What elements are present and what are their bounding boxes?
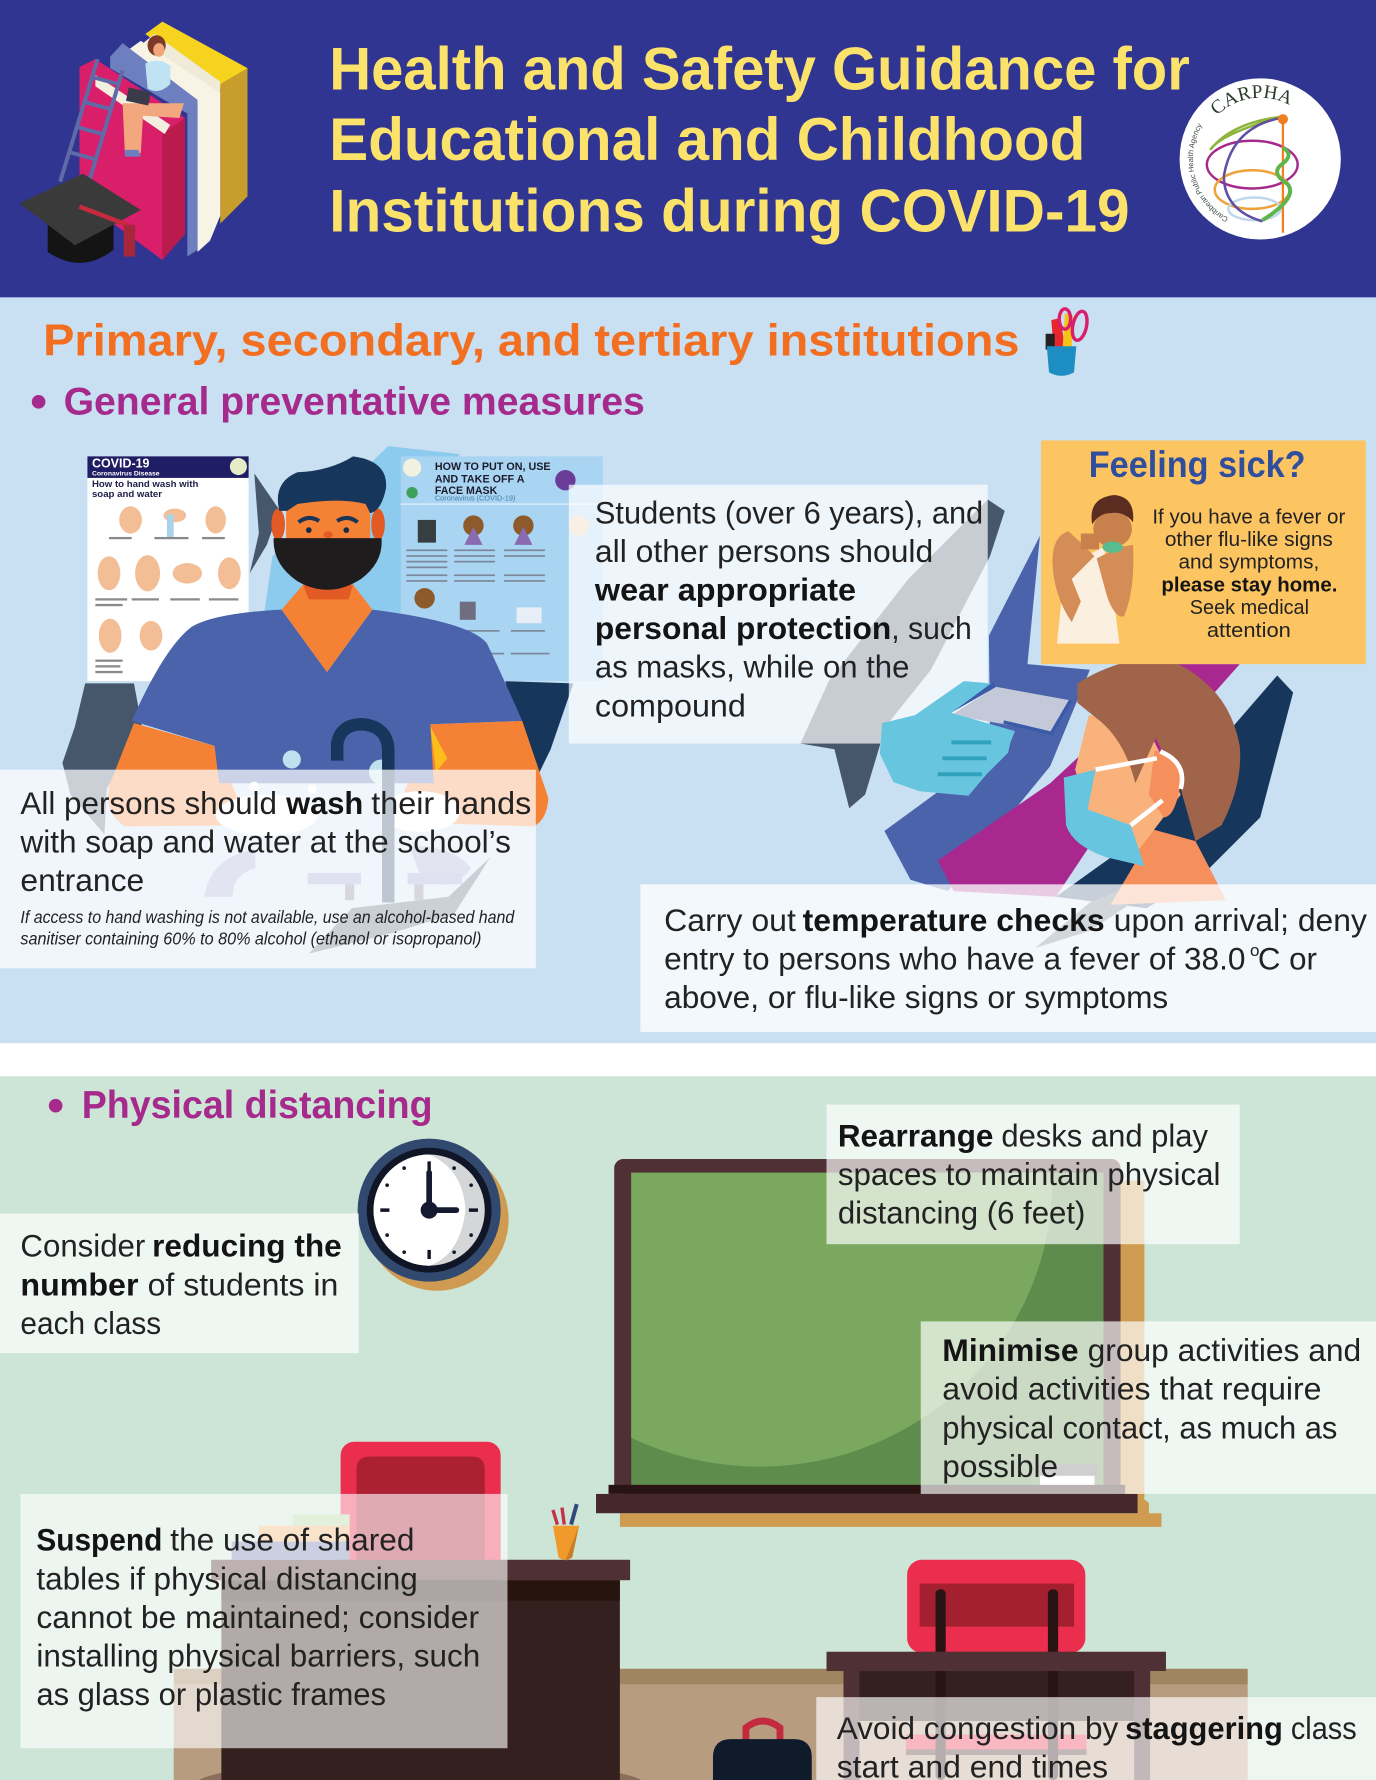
- poster: how to hand wash: [87, 456, 249, 681]
- panel: feeling sick: [1041, 440, 1366, 664]
- title: Institutions during COVID-19: [329, 178, 1130, 245]
- panel: staggering class times: Avoid congestion by: [837, 1711, 1119, 1746]
- panel: wear personal protection: , such: [891, 611, 972, 646]
- panel: wear personal protection: personal protection: [595, 611, 891, 646]
- text: stay home advice: please stay home.: [1161, 574, 1337, 596]
- panel: rearrange desks: spaces to maintain physical: [838, 1157, 1220, 1192]
- panel: suspend shared tables: cannot be maintained; consider: [36, 1600, 479, 1635]
- panel: temperature checks: C or: [1258, 941, 1317, 976]
- panel: wear personal protection: Students (over 6 years), and: [595, 495, 983, 530]
- title: Educational and Childhood: [329, 106, 1085, 173]
- panel: wear personal protection: compound: [595, 688, 746, 723]
- panel: temperature checks: Carry out: [664, 903, 796, 938]
- panel: wash hands: [0, 770, 536, 968]
- hair: [278, 456, 386, 513]
- neck: [1110, 825, 1226, 905]
- panel: rearrange desks: Rearrange: [838, 1119, 993, 1154]
- panel: minimise group activities: group activities and: [1088, 1333, 1361, 1368]
- panel: staggering class times: class: [1291, 1711, 1357, 1746]
- poster: how to put on a face mask: AND TAKE OFF A: [435, 473, 525, 485]
- panel: suspend shared tables: installing physical barriers, such: [36, 1638, 480, 1673]
- eyes and brows: [299, 518, 358, 522]
- panel: wear personal protection: all other persons should: [595, 534, 933, 569]
- panel: wash hands: All persons should: [20, 786, 277, 821]
- poster: how to hand wash: soap and water: [92, 489, 162, 500]
- panel: temperature checks: above, or flu-like signs or symptoms: [664, 980, 1168, 1015]
- hair: [1077, 656, 1240, 841]
- surgical mask: [1064, 770, 1144, 866]
- text: stay home advice: other flu-like signs: [1165, 529, 1333, 551]
- panel: wash hands: entrance: [20, 863, 144, 898]
- panel: temperature checks: temperature checks: [803, 903, 1105, 938]
- poster: how to put on a face mask: HOW TO PUT ON, USE: [435, 461, 551, 473]
- text: stay home advice: and symptoms,: [1178, 552, 1319, 574]
- panel: staggering class times: [816, 1697, 1376, 1780]
- student: [148, 35, 166, 56]
- face: [271, 509, 285, 540]
- poster: how to hand wash: How to hand wash with: [92, 479, 198, 490]
- ear: [1149, 750, 1181, 817]
- panel: rearrange desks: [827, 1105, 1240, 1244]
- icon: CARPHA logo: [1180, 78, 1341, 240]
- sink: [204, 849, 255, 897]
- icon: pencil cup: [1046, 309, 1089, 376]
- panel: wash hands: with soap and water at the school’s: [19, 825, 511, 860]
- panel: wash hands: If access to hand washing is not available, use an alcohol-based hand: [20, 907, 515, 927]
- sub-heading: physical distancing: Physical distancing: [82, 1084, 433, 1127]
- text: stay home advice: Seek medical: [1190, 597, 1309, 619]
- illustration: blackboard: [596, 1159, 1162, 1527]
- ladder: [60, 59, 123, 191]
- poster: how to put on a face mask: Coronavirus (COVID-19): [435, 494, 515, 503]
- panel: minimise group activities: possible: [942, 1449, 1058, 1484]
- illustration: man washing hands: [108, 456, 548, 902]
- panel: suspend shared tables: [20, 1494, 507, 1748]
- poster: how to put on a face mask: FACE MASK: [435, 485, 498, 497]
- poster: how to put on a face mask: [401, 456, 603, 681]
- icon: person coughing: [1052, 495, 1133, 644]
- panel: reduce number of students: [0, 1214, 359, 1353]
- faucet: [337, 724, 388, 902]
- panel: temperature checks: o: [1250, 941, 1259, 960]
- poster: how to hand wash: Coronavirus Disease: [92, 471, 160, 478]
- illustration: brush strokes behind the man: [62, 446, 573, 954]
- panel: reduce number of students: Consider: [20, 1229, 145, 1264]
- illustration: floor: [174, 1669, 1248, 1780]
- illustration: brush strokes behind temperature check: [800, 499, 1293, 948]
- face mask: [274, 538, 382, 590]
- title: [329, 36, 1190, 245]
- panel: suspend shared tables: Suspend: [36, 1523, 162, 1558]
- text: stay home advice: attention: [1207, 620, 1291, 642]
- icon: CARPHA logo: Caribbean Public Health Agency: [1188, 123, 1228, 222]
- icon: gloved hand with thermometer: [880, 681, 1071, 796]
- shirt: [132, 610, 522, 783]
- panel: reduce number of students: number: [20, 1267, 139, 1302]
- panel: minimise group activities: avoid activities that require: [942, 1372, 1322, 1407]
- panel: staggering class times: staggering: [1125, 1711, 1283, 1746]
- panel: wash hands: wash: [285, 786, 363, 821]
- text: stay home advice: [1152, 506, 1346, 642]
- sub-heading: general preventative measures: General preventative measures: [64, 380, 645, 423]
- panel: rearrange desks: distancing (6 feet): [838, 1196, 1085, 1231]
- poster: how to hand wash: COVID-19: [92, 457, 150, 471]
- graduation cap: [48, 225, 114, 263]
- panel: wear personal protection: as masks, while on the: [595, 650, 909, 685]
- text: stay home advice: If you have a fever or: [1152, 506, 1346, 528]
- header illustration: books, ladder, student and graduation cap: [19, 22, 247, 263]
- panel: wear personal protection: [569, 485, 988, 744]
- panel: suspend shared tables: the use of shared: [170, 1523, 414, 1558]
- title: Health and Safety Guidance for: [329, 36, 1190, 103]
- panel: temperature checks: entry to persons who have a fever of 38.0: [664, 941, 1245, 976]
- icon: backpack: [713, 1721, 812, 1780]
- panel: temperature checks: [640, 884, 1376, 1032]
- panel: reduce number of students: of students in: [148, 1267, 338, 1302]
- panel: wear personal protection: wear appropriate: [594, 573, 856, 608]
- icon: wall clock: [358, 1139, 509, 1291]
- panel: temperature checks: upon arrival; deny: [1114, 903, 1367, 938]
- illustration: person with mask having temperature checked: [1064, 656, 1240, 905]
- panel: minimise group activities: Minimise: [942, 1333, 1079, 1368]
- face: [1075, 715, 1181, 851]
- panel: wash hands: sanitiser containing 60% to 80% alcohol (ethanol or isopropanol): [20, 928, 481, 948]
- neck: [282, 585, 372, 672]
- illustration: teacher desk, chair, books and pencils: [211, 1442, 630, 1780]
- foam and bubbles: [216, 795, 318, 836]
- panel: suspend shared tables: as glass or plastic frames: [36, 1677, 386, 1712]
- heading: feeling sick: Feeling sick?: [1089, 443, 1306, 485]
- panel: rearrange desks: desks and play: [1001, 1119, 1208, 1154]
- panel: reduce number of students: reducing the: [152, 1229, 342, 1264]
- panel: wash hands: their hands: [371, 786, 531, 821]
- panel: minimise group activities: [921, 1321, 1376, 1494]
- panel: reduce number of students: each class: [20, 1306, 161, 1341]
- panel: suspend shared tables: tables if physical distancing: [36, 1561, 418, 1596]
- heading: primary, secondary, and tertiary institutions: Primary, secondary, and tertiary institutions: [43, 316, 1020, 365]
- arms: [108, 723, 250, 826]
- illustration: student desk and chair: [827, 1560, 1166, 1780]
- icon: CARPHA logo: CARPHA: [1212, 85, 1290, 113]
- panel: minimise group activities: physical contact, as much as: [942, 1410, 1337, 1445]
